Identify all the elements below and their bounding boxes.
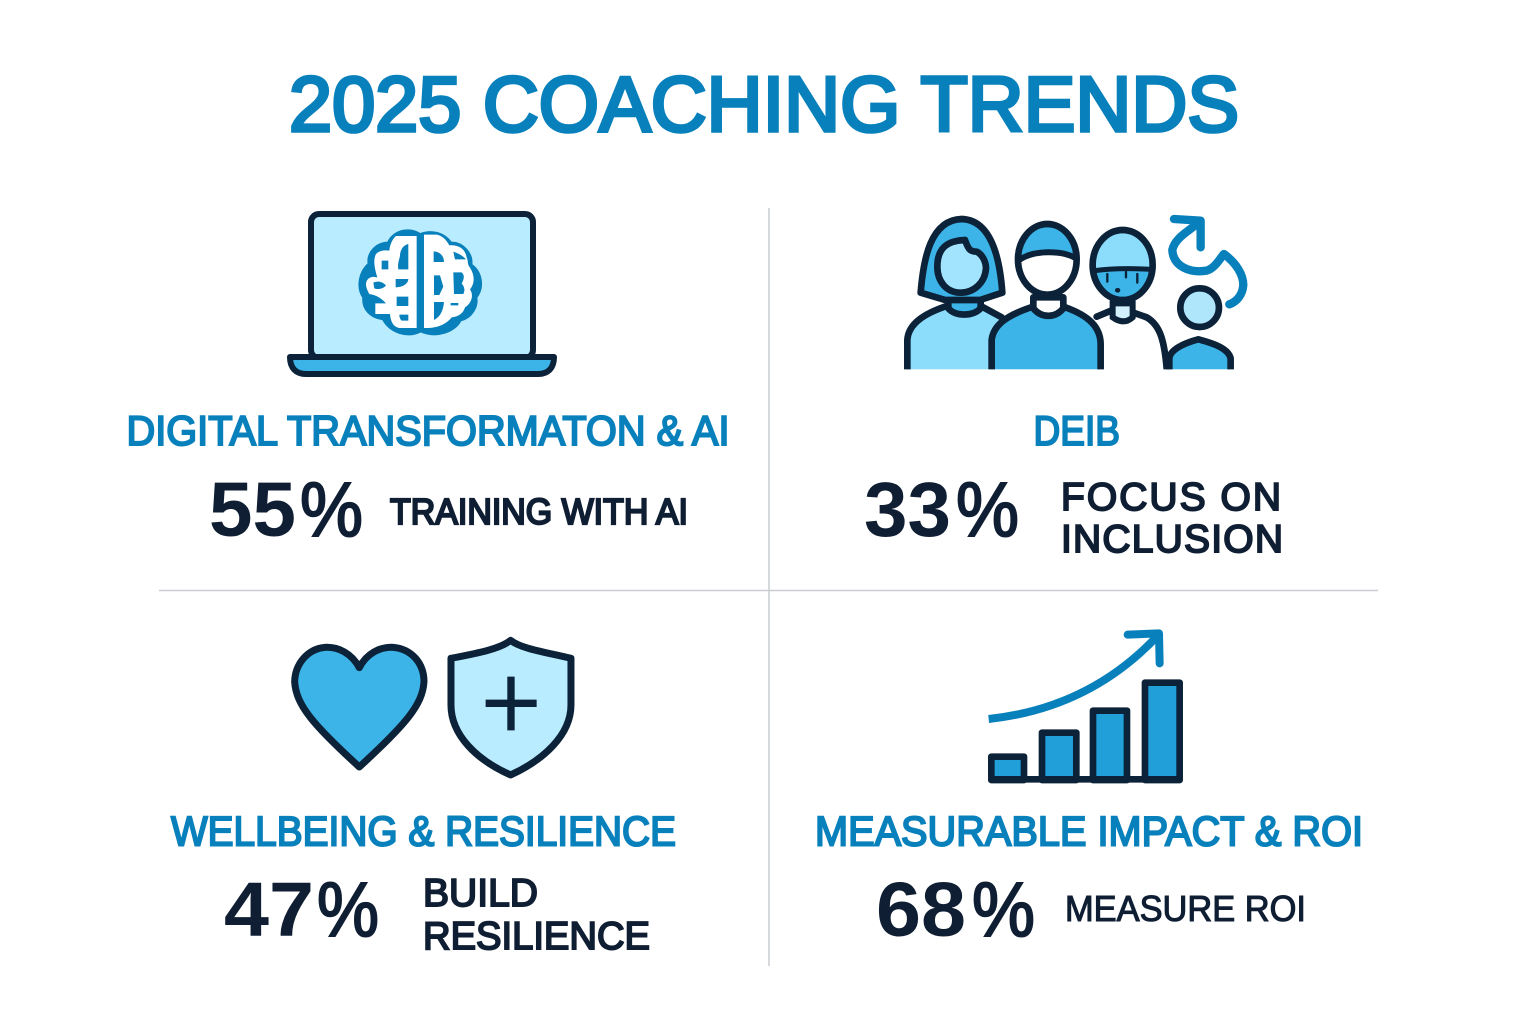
bars (991, 683, 1180, 780)
stat: 68%: % (972, 867, 1035, 953)
panel: measurable impact and ROI (815, 633, 1363, 953)
stat: 55%: 55 (209, 467, 296, 553)
label: focus on inclusion: FOCUS ON (1061, 476, 1281, 519)
label: build resilience (423, 872, 650, 958)
label: build resilience: RESILIENCE (423, 915, 650, 958)
panel: DEIB (864, 219, 1283, 561)
stat: 55%: % (300, 467, 363, 553)
stat: 47%: 47 (224, 867, 314, 953)
icon: heart (295, 647, 424, 767)
arrow: growth trend (989, 633, 1160, 719)
stat: 33%: 33 (864, 467, 951, 553)
icon: shield with plus (451, 640, 571, 775)
stat: 33%: % (956, 467, 1019, 553)
icon: laptop with brain (290, 214, 554, 374)
heading: measurable impact: MEASURABLE IMPACT & ROI (815, 808, 1363, 854)
person: third adult (1093, 230, 1167, 377)
title: 2025 COACHING TRENDS (289, 60, 1239, 148)
stat: 47% (224, 867, 379, 953)
stat: 68% (876, 867, 1035, 953)
heading: wellbeing: WELLBEING & RESILIENCE (171, 808, 676, 854)
heading: DEIB: DEIB (1034, 407, 1120, 454)
arrow: curved (1172, 219, 1243, 304)
label: training with AI: TRAINING WITH AI (390, 491, 688, 532)
panel: digital transformation and AI (126, 214, 730, 553)
stat: 33% (864, 467, 1019, 553)
stat: 68%: 68 (876, 867, 966, 953)
stat: 55% (209, 467, 363, 553)
stat: 47%: % (317, 867, 379, 953)
label: focus on inclusion: INCLUSION (1061, 518, 1283, 561)
label: measure ROI: MEASURE ROI (1065, 888, 1306, 929)
icon: growth bar chart with arrow (989, 633, 1180, 780)
icon: group of people with arrow (907, 219, 1243, 377)
person: woman with long hair (907, 219, 1002, 377)
label: focus on inclusion (1061, 476, 1283, 561)
panel: wellbeing and resilience (171, 640, 676, 958)
person: child (1169, 288, 1231, 377)
person: man in front (992, 224, 1101, 377)
label: build resilience: BUILD (423, 872, 538, 915)
heading: digital transformation: DIGITAL TRANSFORMATON & AI (126, 407, 730, 454)
icon: heart and shield (295, 640, 571, 775)
